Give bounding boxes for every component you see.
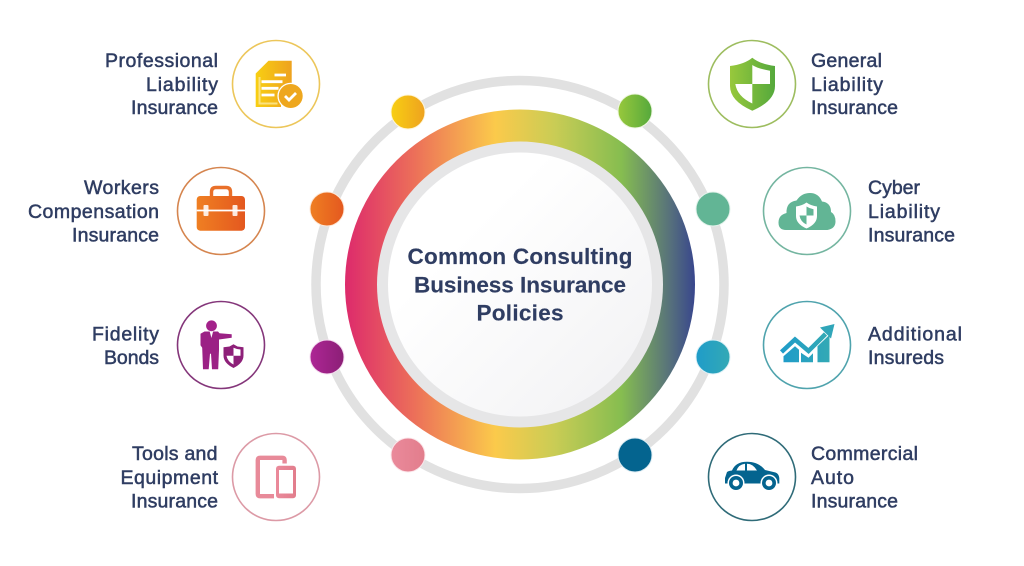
icon: car [725,462,779,492]
dot: green [618,94,652,128]
icon: cloud with shield [778,193,836,230]
dot: dark blue [618,438,652,472]
item: Tools and Equipment Insurance: Tools and [132,443,218,465]
item: Professional Liability Insurance: Professional [105,50,218,72]
item: Cyber Liability Insurance: Cyber [868,177,920,199]
item: Commercial Auto Insurance [708,434,918,520]
item: Cyber Liability Insurance [764,168,955,254]
item: General Liability Insurance: Liability [811,74,883,96]
icon: document with check [256,61,304,109]
item: General Liability Insurance [708,40,898,128]
item: General Liability Insurance: General [811,50,882,72]
item: Fidelity Bonds: Bonds [104,347,159,369]
dot: teal green [696,192,730,226]
item: Workers Compensation Insurance: Insurance [72,225,159,247]
item: Cyber Liability Insurance: Insurance [868,225,955,247]
center disc [377,142,663,428]
icon: shield [730,58,775,111]
outer grey ring [316,80,724,488]
item: Professional Liability Insurance [105,40,320,128]
item: Additional Insureds: Additional [868,324,962,346]
item: Tools and Equipment Insurance: Equipment [120,467,219,489]
item: Additional Insureds [764,302,962,388]
item: General Liability Insurance: Insurance [811,97,898,119]
item: Workers Compensation Insurance: Workers [84,177,159,199]
item: Workers Compensation Insurance [28,168,264,254]
dot: pink [391,438,425,472]
title: Policies [476,300,564,326]
item: Professional Liability Insurance: Insurance [131,97,218,119]
icon: growth chart [782,324,834,362]
item: Professional Liability Insurance: Liability [146,74,218,96]
item: Additional Insureds: Insureds [868,347,944,369]
item: Tools and Equipment Insurance [120,434,320,520]
item: Commercial Auto Insurance: Auto [811,467,854,489]
title: Business Insurance [414,272,626,298]
item: Fidelity Bonds: Fidelity [92,324,159,346]
item: Commercial Auto Insurance: Insurance [811,491,898,513]
dot: blue [696,340,730,374]
title: Common Consulting [408,244,632,269]
item: Tools and Equipment Insurance: Insurance [131,491,218,513]
icon: briefcase [197,188,245,231]
dot: yellow [391,95,425,129]
item: Fidelity Bonds [92,302,264,388]
item: Commercial Auto Insurance: Commercial [811,443,918,465]
item: Cyber Liability Insurance: Liability [868,201,940,223]
dot: purple [310,340,344,374]
icon: person with shield [200,320,244,369]
title [408,244,632,326]
item: Workers Compensation Insurance: Compensation [28,201,159,223]
dot: orange [310,192,344,226]
icon: tablet and phone [258,458,296,498]
rainbow ring [345,110,695,460]
